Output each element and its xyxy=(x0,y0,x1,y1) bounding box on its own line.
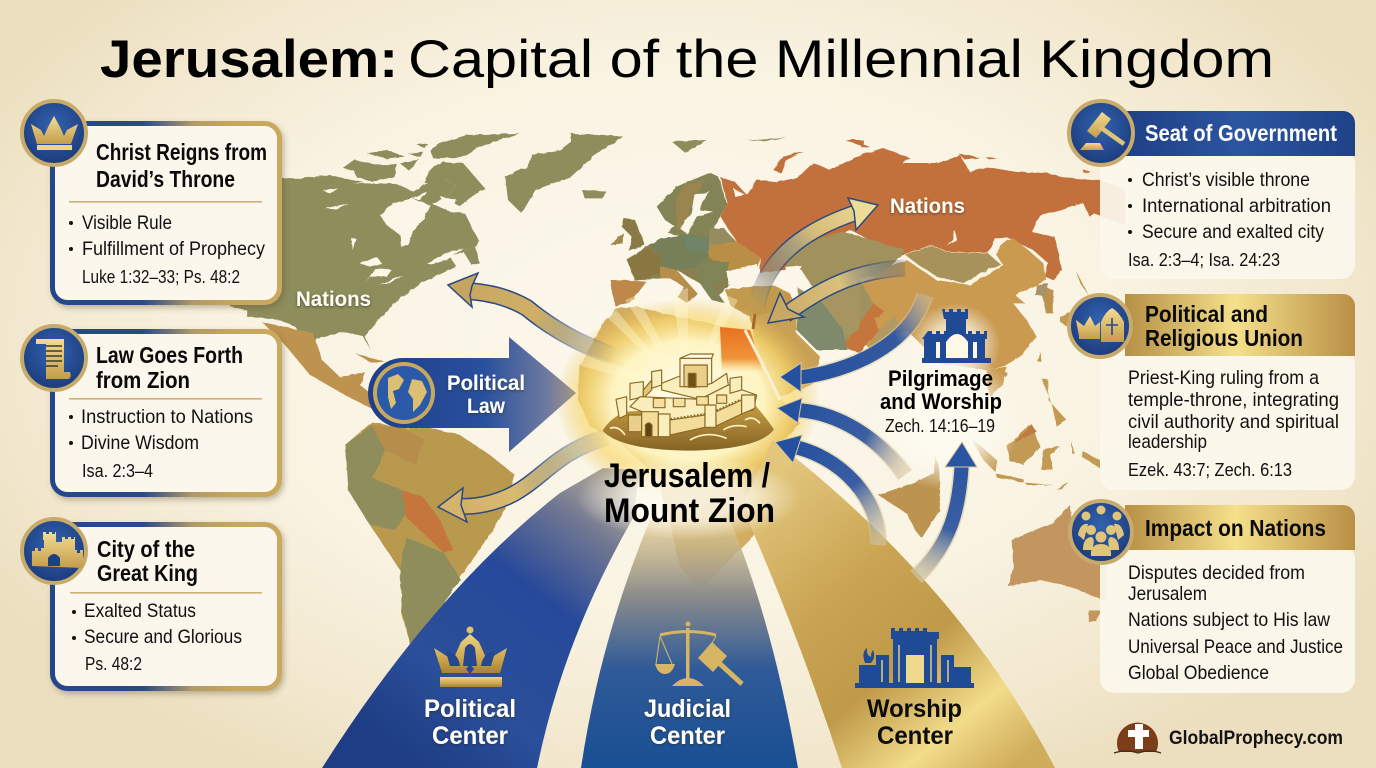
bullets: Secure and Glorious xyxy=(84,626,242,648)
heading: from Zion xyxy=(96,367,190,393)
icon: temple xyxy=(855,628,974,688)
header: political and religious union: Political and xyxy=(1145,301,1268,327)
panel: christ reigns xyxy=(22,101,280,302)
label: worship center xyxy=(867,695,962,750)
pilgrimage halo xyxy=(869,303,1021,490)
header: seat of government xyxy=(1125,111,1355,156)
panel: impact on nations xyxy=(1070,501,1355,693)
russia xyxy=(720,143,1125,280)
bullets: Isa. 2:3–4 xyxy=(82,461,153,481)
label: political law: Law xyxy=(467,395,506,418)
arrow: outward to north america xyxy=(448,273,615,357)
africa xyxy=(578,307,800,590)
middle east xyxy=(750,263,860,397)
heading: Christ Reigns from xyxy=(96,139,267,165)
label: political law xyxy=(447,372,525,418)
header: political and religious union: Religious Union xyxy=(1145,325,1303,351)
body text: Global Obedience xyxy=(1128,662,1269,684)
asia east and islands xyxy=(830,238,1107,622)
bullets: Exalted Status xyxy=(84,600,196,622)
bullets: Secure and exalted city xyxy=(1142,221,1324,243)
heading: David’s Throne xyxy=(96,166,235,192)
body text: Disputes decided from xyxy=(1128,562,1305,584)
label: political center: Center xyxy=(432,722,508,750)
label: worship center: Worship xyxy=(867,695,962,723)
label: political center: Political xyxy=(424,695,516,723)
greenland and iceland xyxy=(505,133,623,213)
south america xyxy=(345,422,515,650)
bullets: Ps. 48:2 xyxy=(85,654,142,674)
bullets: Divine Wisdom xyxy=(81,432,199,454)
body text: Priest-King ruling from a xyxy=(1128,367,1319,389)
icon: castle badge xyxy=(22,519,86,583)
heading xyxy=(96,139,267,192)
political law arrow xyxy=(368,337,576,452)
heading: City of the xyxy=(97,536,195,562)
bullets: International arbitration xyxy=(1142,195,1331,217)
title: Jerusalem: xyxy=(100,30,398,89)
heading: pilgrimage: Pilgrimage xyxy=(888,366,993,391)
body text xyxy=(1128,367,1339,480)
madagascar xyxy=(777,497,800,545)
arrow: outward to south america xyxy=(438,437,608,522)
label: worship center: Center xyxy=(877,722,953,750)
logo: globalprophecy.com: GlobalProphecy.com xyxy=(1169,728,1343,749)
bullets xyxy=(69,406,253,481)
panel: political and religious union xyxy=(1069,294,1355,490)
icon: crown badge xyxy=(22,101,86,165)
heading: Law Goes Forth xyxy=(96,342,243,368)
arrow: blue inward from south east xyxy=(777,398,905,475)
world map xyxy=(230,133,1125,650)
center label: jerusalem / mount zion: Jerusalem / xyxy=(604,457,770,495)
egypt highlight xyxy=(720,327,763,372)
title: Capital of the Millennial Kingdom xyxy=(408,30,1274,89)
center label: jerusalem / mount zion xyxy=(604,457,775,530)
bullets xyxy=(1128,169,1331,270)
central asia xyxy=(785,232,906,287)
reference: zechariah: Zech. 14:16–19 xyxy=(885,416,995,436)
icon: gavel badge xyxy=(1069,101,1133,165)
icon: globe xyxy=(373,362,435,424)
body text: Jerusalem xyxy=(1128,583,1207,605)
heading: pilgrimage xyxy=(880,366,1002,414)
header: impact on nations: Impact on Nations xyxy=(1145,515,1326,541)
bullets: Instruction to Nations xyxy=(81,406,253,428)
body text: Ezek. 43:7; Zech. 6:13 xyxy=(1128,459,1292,480)
arrow: outward to nations in asia xyxy=(757,198,878,307)
body text: civil authority and spiritual xyxy=(1128,411,1339,433)
bullets: Fulfillment of Prophecy xyxy=(82,238,265,260)
band: judicial center xyxy=(581,520,798,768)
title xyxy=(100,30,1274,89)
central america xyxy=(262,322,385,412)
panel: seat of government xyxy=(1069,101,1355,279)
label: judicial center: Center xyxy=(650,722,725,750)
body text xyxy=(1128,562,1343,684)
label: nations west: Nations xyxy=(296,288,371,311)
body text: leadership xyxy=(1128,431,1207,453)
icon: crown xyxy=(434,626,507,687)
label: political center xyxy=(424,695,516,750)
center label: jerusalem / mount zion: Mount Zion xyxy=(604,492,775,530)
arrow: blue inward from east xyxy=(780,295,925,392)
europe xyxy=(610,137,863,317)
logo: globalprophecy.com xyxy=(1114,723,1343,753)
band: worship center xyxy=(745,440,1055,768)
label: judicial center xyxy=(644,695,731,750)
label: judicial center: Judicial xyxy=(644,695,731,723)
header: political and religious union xyxy=(1125,294,1355,356)
heading: Great King xyxy=(97,560,198,586)
text glow behind center label xyxy=(576,456,800,540)
mongolia xyxy=(905,245,1002,283)
header: seat of government: Seat of Government xyxy=(1145,120,1337,146)
heading: pilgrimage: and Worship xyxy=(880,389,1002,414)
body text: Universal Peace and Justice xyxy=(1128,636,1343,658)
bullets xyxy=(72,600,242,674)
icon: jerusalem city on mount zion xyxy=(603,354,774,451)
body text: temple-throne, integrating xyxy=(1128,389,1339,411)
north america xyxy=(230,133,623,351)
arrow: blue upward to pilgrimage xyxy=(916,442,977,577)
bullets: Visible Rule xyxy=(82,212,172,234)
icon: scales and gavel xyxy=(655,622,742,686)
panel: law goes forth xyxy=(22,326,280,494)
bullets: Isa. 2:3–4; Isa. 24:23 xyxy=(1128,249,1280,270)
heading xyxy=(96,342,243,393)
icon: temple tower xyxy=(922,309,991,363)
icon: crown and mitre badge xyxy=(1069,295,1131,357)
heading xyxy=(97,536,198,586)
panel: city of the great king xyxy=(22,519,280,688)
header: impact on nations xyxy=(1125,505,1355,550)
icon: people badge xyxy=(1070,501,1132,563)
icon: scroll badge xyxy=(22,326,86,390)
bullets: Luke 1:32–33; Ps. 48:2 xyxy=(82,267,240,287)
label: nations east: Nations xyxy=(890,195,965,218)
arrow: blue inward from south xyxy=(775,435,878,545)
bullets xyxy=(69,212,265,287)
red sea xyxy=(745,330,780,400)
pilgrimage and worship xyxy=(880,309,1002,436)
israel marker xyxy=(753,314,755,329)
central glow xyxy=(556,288,820,502)
label: political law: Political xyxy=(447,372,525,395)
body text: Nations subject to His law xyxy=(1128,609,1331,631)
band: political center xyxy=(322,468,640,768)
arrow: inward from asia xyxy=(768,268,905,323)
bullets: Christ’s visible throne xyxy=(1142,169,1310,191)
